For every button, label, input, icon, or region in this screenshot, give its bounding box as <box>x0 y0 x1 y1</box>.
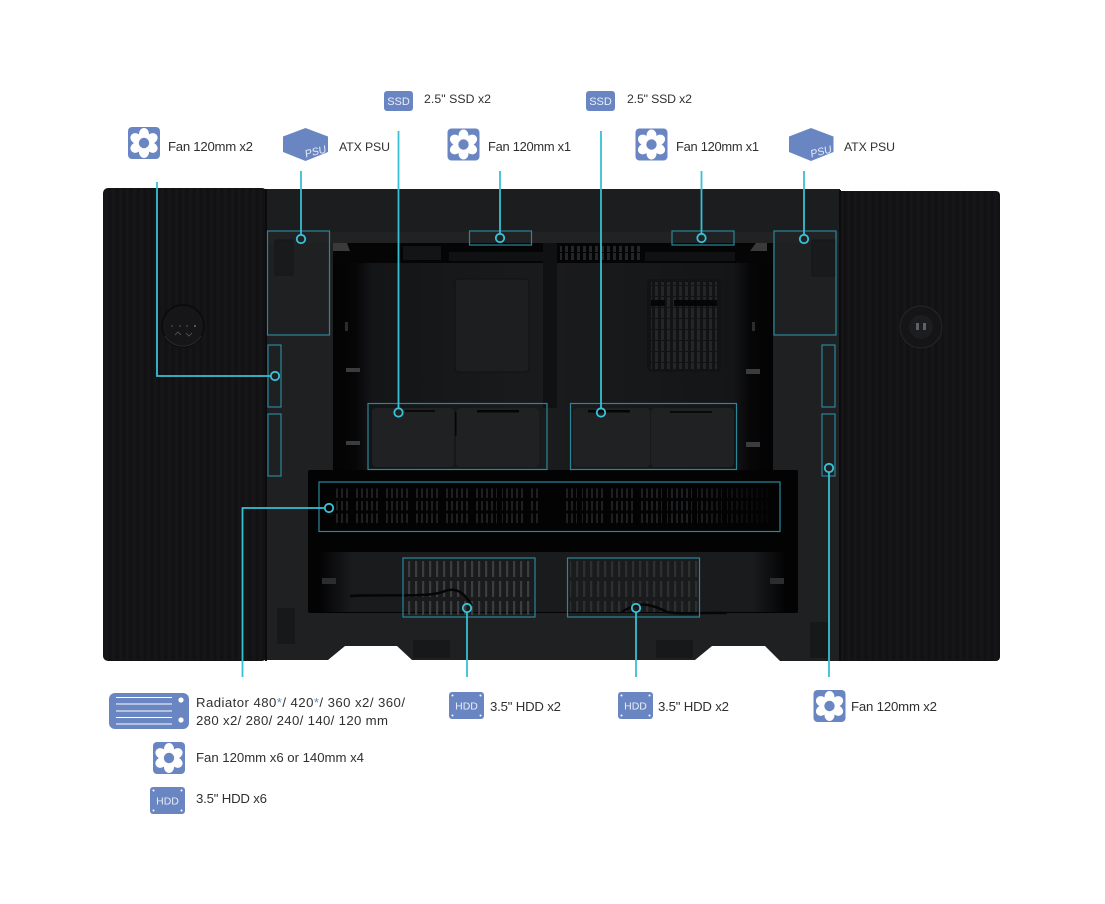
chassis feet <box>277 608 828 658</box>
callout line: right PSU <box>800 171 808 243</box>
label: HDD x2 left <box>449 692 561 719</box>
callout line: top fan left <box>496 171 504 242</box>
callout line: right HDD <box>632 604 640 677</box>
label: ATX PSU right <box>789 128 895 161</box>
label: ATX PSU right: PSU <box>810 143 832 161</box>
ssd trays right <box>573 408 734 467</box>
label: fan 120mm x1 right <box>636 128 759 160</box>
label: HDD x6: HDD <box>156 796 179 808</box>
label: ATX PSU right: ATX PSU <box>844 140 895 154</box>
label: ATX PSU left <box>283 128 390 161</box>
label: fan 120mm x2 right: Fan 120mm x2 <box>851 699 937 714</box>
label: SSD right: 2.5" SSD x2 <box>627 92 692 106</box>
icon: right door wireless charger <box>900 306 942 348</box>
highlight boxes <box>268 231 836 617</box>
label: fan 120mm x1 left: Fan 120mm x1 <box>488 139 571 154</box>
label: HDD x2 right: 3.5" HDD x2 <box>658 699 729 714</box>
callout line: radiator <box>242 504 333 677</box>
callout line: top fan right <box>697 171 706 242</box>
label: fan 120mm x2 left <box>128 127 253 159</box>
ssd trays left <box>372 408 539 467</box>
label: SSD right: SSD <box>589 96 612 108</box>
label: ATX PSU left: PSU <box>305 143 327 161</box>
label: HDD x2 right <box>618 692 729 719</box>
label: radiator sizes <box>109 693 405 729</box>
label: SSD left <box>384 91 491 111</box>
callout line: right SSD <box>597 131 605 417</box>
callout line: fan right side <box>825 464 833 677</box>
label: ATX PSU left: ATX PSU <box>339 140 390 154</box>
label: radiator sizes: Radiator 480*/ 420*/ 360 x2/ 360/ <box>196 695 405 710</box>
upper compartment <box>333 243 773 471</box>
callout line: fan left side <box>157 182 279 380</box>
psu plate marks <box>275 240 835 276</box>
label: fan 120mm x6 or 140mm x4 <box>153 742 364 774</box>
label: fan 120mm x2 right <box>814 690 937 722</box>
lower compartment <box>308 470 798 613</box>
rear panel blank <box>455 279 529 372</box>
callout line: left HDD <box>463 604 471 677</box>
hdd mount slots <box>350 559 727 615</box>
icon: left door control knob <box>162 305 204 347</box>
panel: chassis frame <box>265 189 841 661</box>
label: HDD x2 left: 3.5" HDD x2 <box>490 699 561 714</box>
label: fan 120mm x2 left: Fan 120mm x2 <box>168 139 253 154</box>
label: SSD right <box>586 91 692 111</box>
label: fan 120mm x1 left <box>448 128 571 160</box>
label: radiator sizes: 280 x2/ 280/ 240/ 140/ 120 mm <box>196 713 388 728</box>
label: fan 120mm x1 right: Fan 120mm x1 <box>676 139 759 154</box>
label: SSD left: SSD <box>387 96 410 108</box>
callout line: left PSU <box>297 171 305 243</box>
label: HDD x2 right: HDD <box>624 700 647 712</box>
label: SSD left: 2.5" SSD x2 <box>424 92 491 106</box>
callout line: left SSD <box>394 131 403 417</box>
panel: left side door <box>103 188 267 661</box>
label: HDD x2 left: HDD <box>455 700 478 712</box>
label: HDD x6: 3.5" HDD x6 <box>196 791 267 806</box>
panel: right side door <box>841 191 1000 661</box>
rear panel vent <box>647 279 721 372</box>
label: fan 120mm x6 or 140mm x4: Fan 120mm x6 or 140mm x4 <box>196 750 364 765</box>
label: HDD x6 <box>150 787 267 814</box>
